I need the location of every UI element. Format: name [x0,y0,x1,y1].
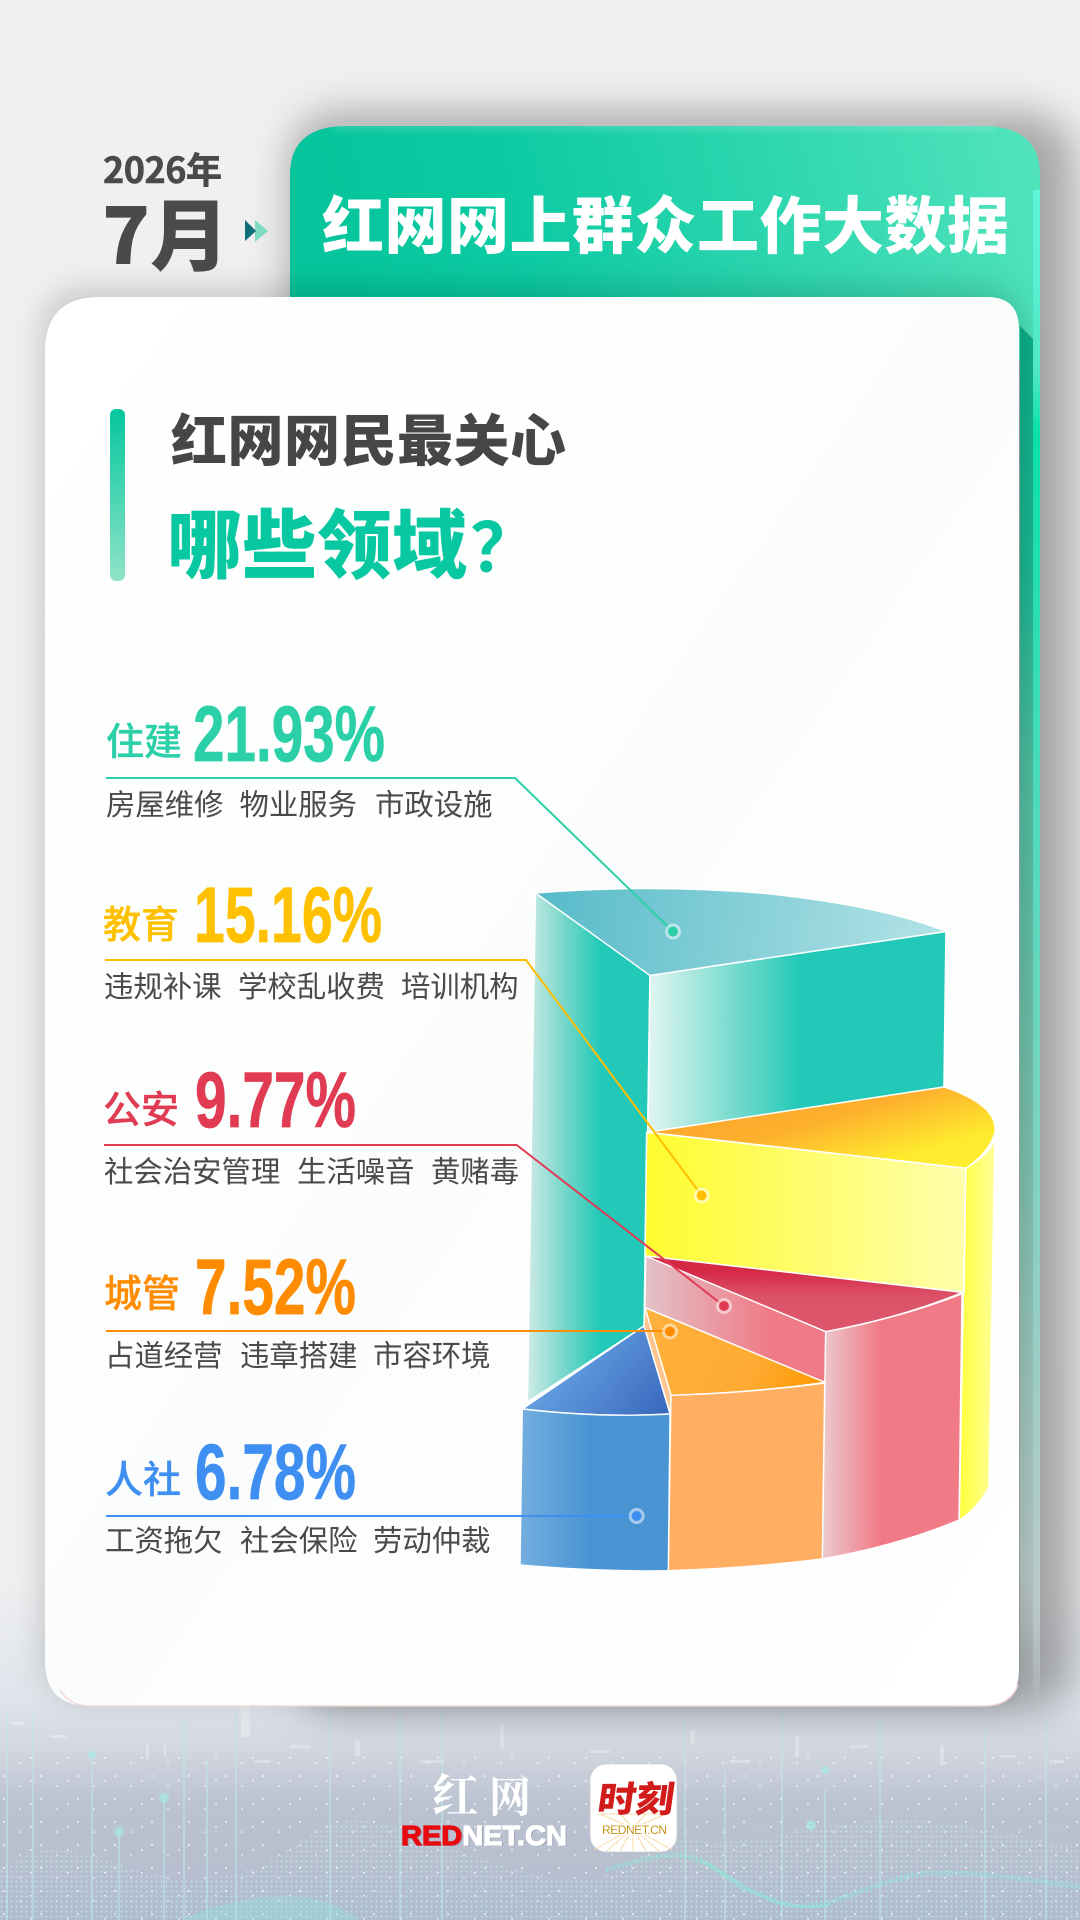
header panel with shadow [290,112,1075,1712]
logo: app icon [590,1764,678,1852]
category: education: 学校乱收费 [238,964,385,1006]
leader line: housing [106,778,681,940]
category: human resources: 工资拖欠 [105,1518,223,1560]
category: education: 违规补课 [104,964,222,1006]
heading [110,397,566,581]
category: housing: 市政设施 [375,782,493,824]
teal left face [528,893,650,1402]
category: public security: 生活噪音 [297,1149,415,1191]
category: human resources: 6.78% [195,1427,356,1516]
logo: rednet: REDNET.CN [402,1821,568,1852]
amber top [645,1308,825,1395]
leader line: urban management [106,1324,678,1340]
amber front face [668,1383,825,1571]
category: urban management: 市容环境 [373,1333,491,1375]
icon: double arrow [245,220,268,242]
heading line one: 红网网民最关心 [171,397,566,478]
leader line: human resources [106,1508,645,1524]
orange-yellow top [648,1087,995,1168]
leader line: public security [104,1145,732,1314]
amber side strip [644,1308,671,1413]
category: housing: 房屋维修 [106,782,224,824]
leader line: education [105,960,710,1204]
heading line two: 哪些领域？ [167,485,538,594]
category: human resources: 社会保险 [240,1518,358,1560]
heading accent bar [110,409,125,581]
category: education: 15.16% [194,870,382,959]
teal top [536,888,946,975]
red front face [822,1294,962,1559]
category: urban management: 违章搭建 [240,1333,358,1375]
category: public security: 黄赌毒 [431,1149,519,1191]
panel: white card [40,286,1024,1706]
category: public security: 社会治安管理 [104,1149,280,1191]
category: housing [106,689,681,940]
category: urban management: 7.52% [195,1242,356,1331]
category: education: 教育 [103,894,179,949]
logo: rednet: REDNET.CN [401,1820,567,1851]
title: 红网网上群众工作大数据 [322,176,1009,266]
category: education [103,870,710,1204]
blue front face [520,1409,670,1571]
logo: rednet [401,1760,568,1852]
category: urban management: 城管 [104,1263,180,1318]
category: public security: 公安 [103,1079,179,1134]
yellow front face [645,1132,966,1292]
red top [646,1256,963,1332]
category: public security [103,1055,732,1314]
category: housing: 物业服务 [240,782,357,824]
category: public security: 9.77% [195,1055,356,1144]
category: urban management [104,1242,678,1375]
month label: 7月 [102,175,229,287]
category: housing: 住建 [106,711,182,766]
category: human resources: 人社 [105,1449,181,1504]
chart: 3D stepped pie [520,888,995,1571]
category: human resources: 劳动仲裁 [373,1518,491,1560]
category: urban management: 占道经营 [105,1333,223,1375]
teal right face [648,932,946,1132]
blue top [522,1326,670,1415]
logo: rednet: 红 [432,1760,478,1826]
category: human resources [105,1427,645,1560]
year label: 2026年 [103,142,222,194]
logo: rednet: 网 [489,1765,531,1825]
category: housing: 21.93% [193,689,385,778]
red side strip [645,1256,826,1382]
logo: app icon: 时刻 [595,1771,678,1823]
logo: app icon: REDNET.CN [602,1823,667,1837]
yellow right face [959,1135,995,1520]
category: education: 培训机构 [401,964,519,1006]
